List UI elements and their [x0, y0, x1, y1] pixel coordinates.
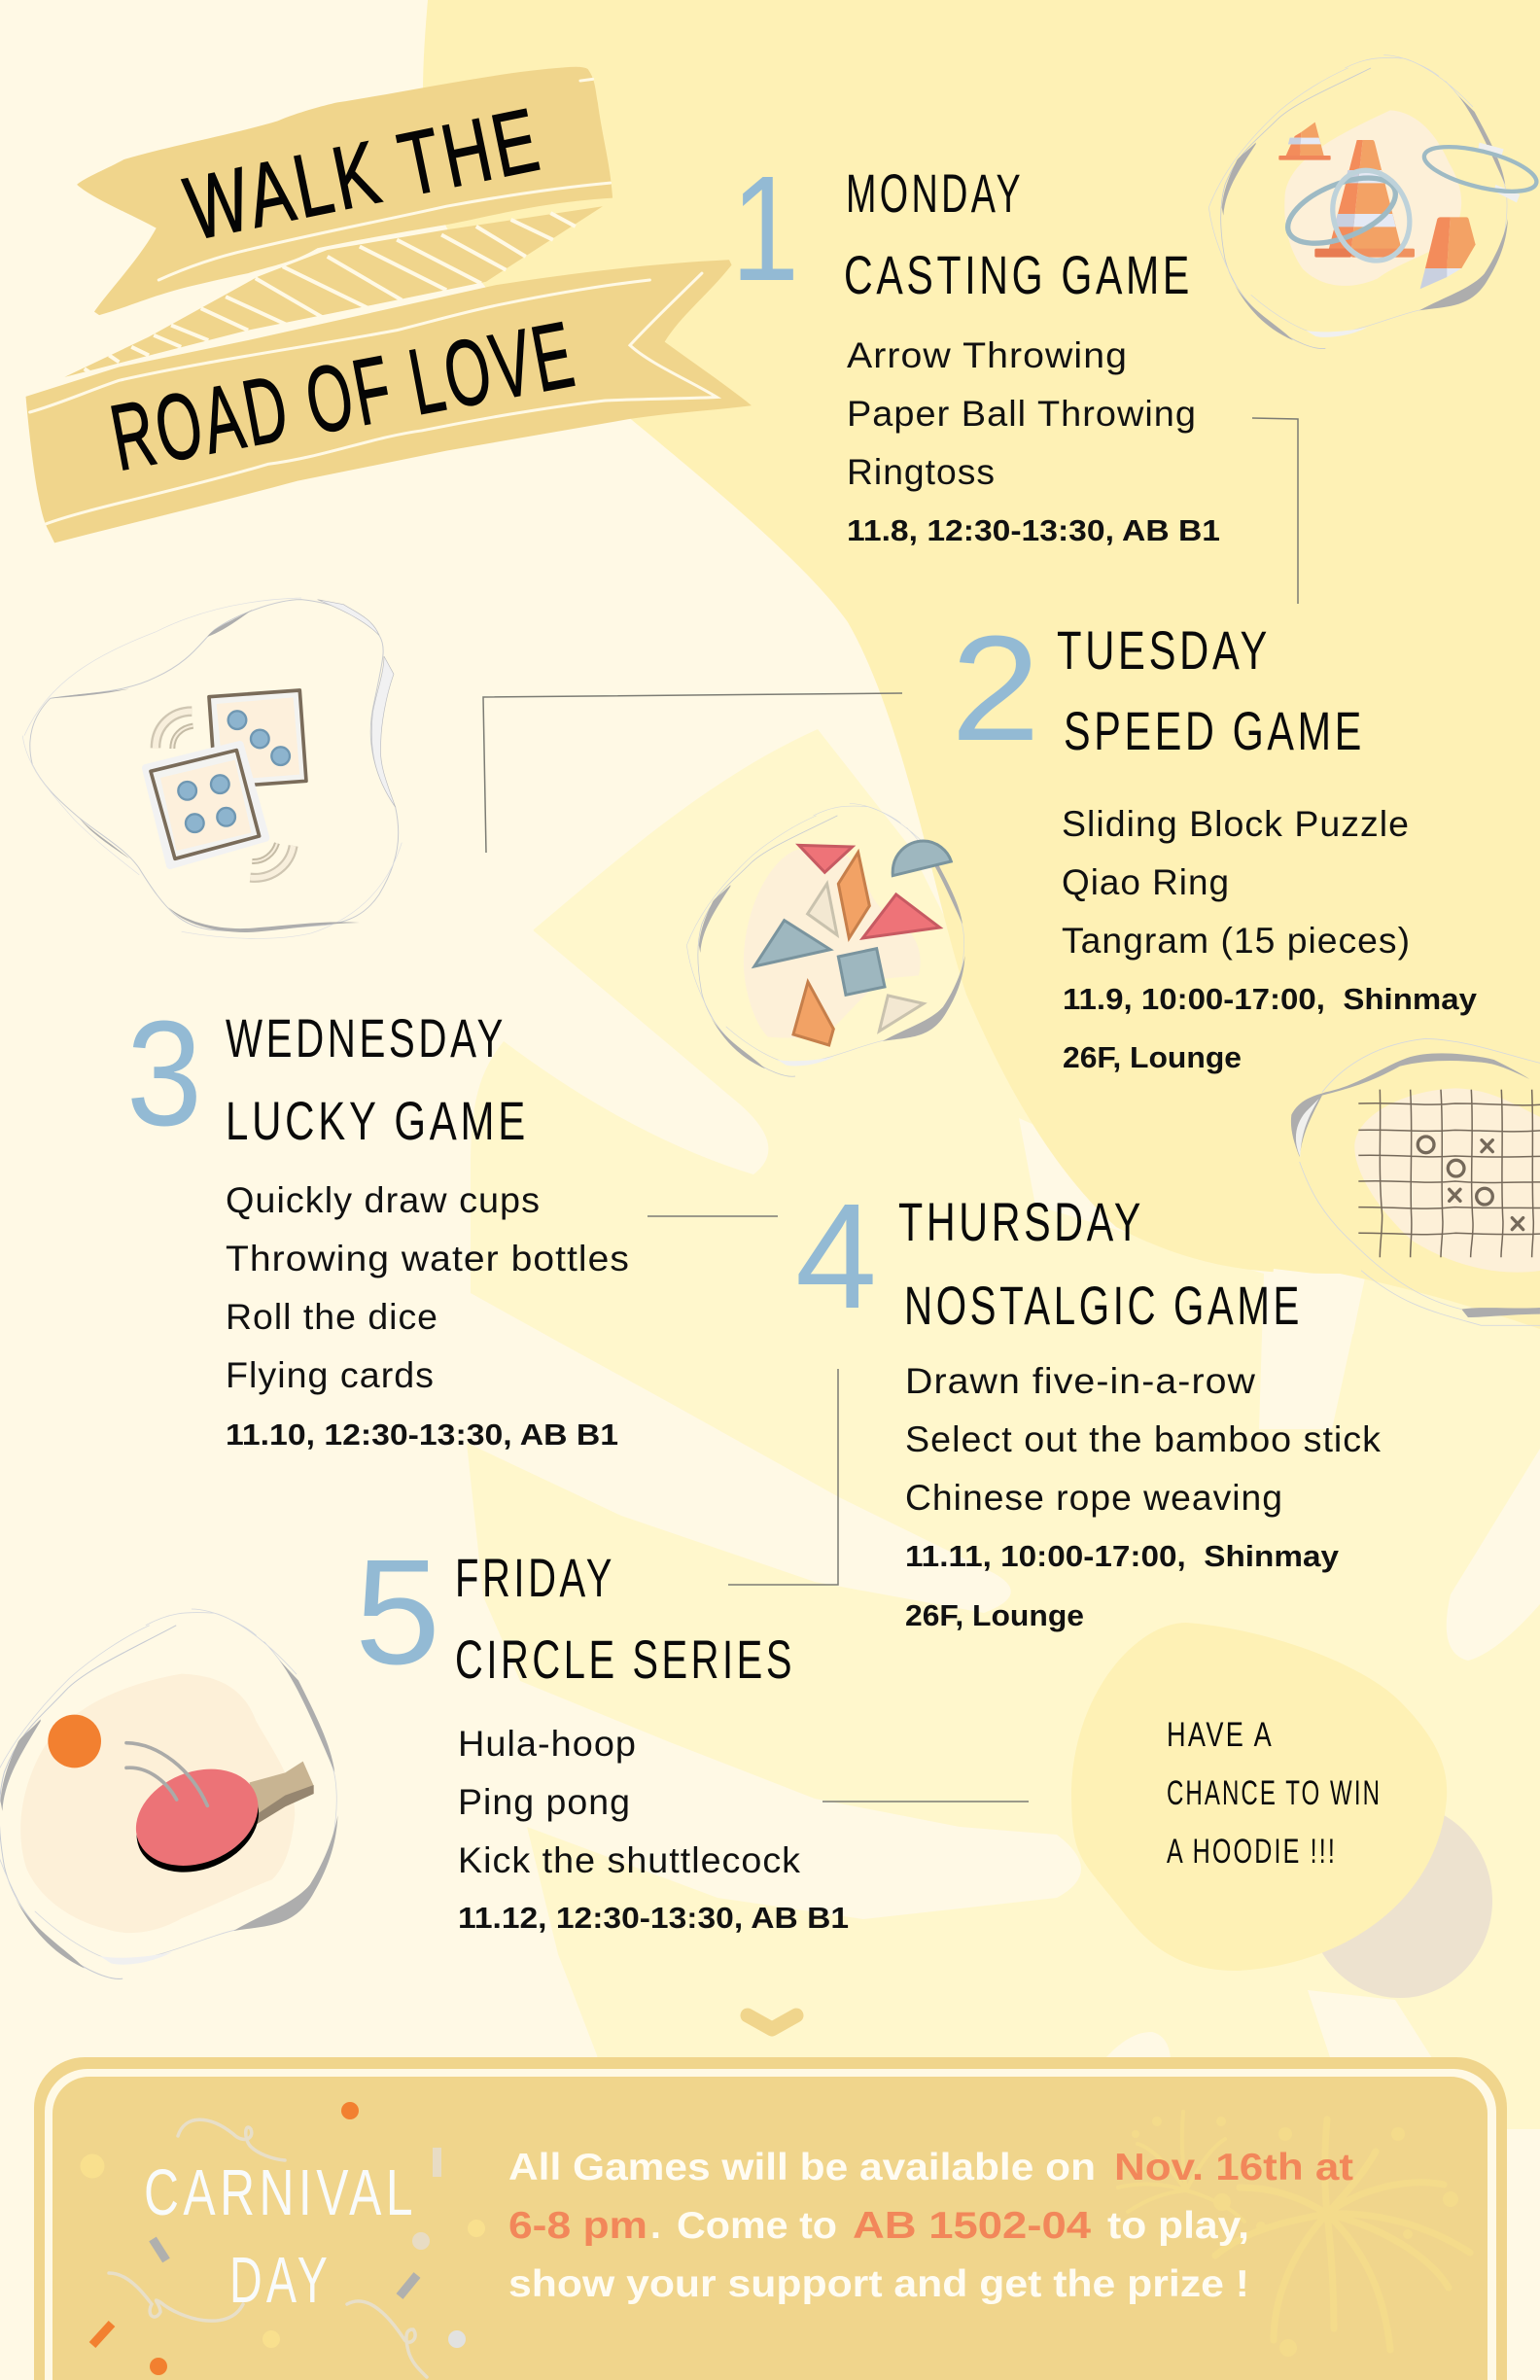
Tuesday games: 26F, Lounge — [1063, 1040, 1242, 1074]
carnival heading: CARNIVAL — [144, 2156, 417, 2229]
Tuesday games: Tangram (15 pieces) — [1062, 921, 1411, 961]
Tuesday heading: SPEED GAME — [1064, 700, 1365, 761]
Friday games: Ping pong — [458, 1782, 631, 1822]
carnival description — [508, 2147, 1353, 2305]
Tuesday games — [1062, 804, 1478, 1074]
panel: Monday — [731, 145, 1220, 547]
title banner — [26, 67, 752, 542]
Wednesday heading — [226, 1007, 529, 1151]
Tuesday heading — [1057, 619, 1365, 761]
Tuesday games: Sliding Block Puzzle — [1062, 804, 1410, 844]
carnival description: . — [650, 2205, 661, 2247]
Thursday games: 11.11, 10:00-17:00, Shinmay — [905, 1539, 1340, 1573]
Thursday games — [905, 1361, 1382, 1632]
Friday games: 11.12, 12:30-13:30, AB B1 — [458, 1901, 849, 1935]
Tuesday games: 11.9, 10:00-17:00, Shinmay — [1063, 982, 1478, 1016]
Thursday games: Select out the bamboo stick — [905, 1419, 1382, 1459]
icon: five-in-a-row grid — [1291, 1038, 1540, 1325]
Friday games: Hula-hoop — [458, 1724, 637, 1764]
carnival heading — [144, 2156, 417, 2317]
panel: Wednesday — [126, 990, 630, 1452]
Friday heading — [455, 1547, 795, 1690]
number 2: 2 — [951, 605, 1040, 772]
Wednesday games: Roll the dice — [226, 1297, 438, 1337]
Friday heading: CIRCLE SERIES — [455, 1628, 795, 1690]
Thursday games: Chinese rope weaving — [905, 1478, 1283, 1518]
carnival description: AB 1502-04 — [853, 2205, 1091, 2247]
Monday games: 11.8, 12:30-13:30, AB B1 — [847, 513, 1220, 547]
number 3: 3 — [126, 990, 202, 1157]
callout: win a hoodie — [1071, 1623, 1492, 1998]
Thursday heading: THURSDAY — [898, 1191, 1144, 1252]
Friday games: Kick the shuttlecock — [458, 1840, 801, 1880]
Wednesday games: Flying cards — [226, 1355, 435, 1395]
icon: traffic cones and rings — [1208, 55, 1540, 349]
Monday games: Ringtoss — [847, 452, 996, 492]
Friday games — [458, 1724, 849, 1935]
icon: tangram pieces — [686, 803, 965, 1076]
ribbon shapes — [26, 67, 752, 542]
panel: Friday — [355, 1528, 849, 1935]
carnival description: 6-8 pm — [508, 2205, 648, 2247]
icon: confetti — [80, 2102, 485, 2377]
carnival description: All Games will be available on — [508, 2147, 1096, 2188]
Wednesday games: 11.10, 12:30-13:30, AB B1 — [226, 1418, 618, 1452]
Wednesday games: Throwing water bottles — [226, 1239, 630, 1278]
Monday games: Paper Ball Throwing — [847, 394, 1197, 434]
title line 2: ROAD OF LOVE — [103, 302, 584, 491]
carnival description: Come to — [677, 2205, 837, 2247]
Monday heading: CASTING GAME — [844, 244, 1193, 305]
callout: win a hoodie: A HOODIE !!! — [1167, 1833, 1337, 1871]
callout: win a hoodie: HAVE A — [1167, 1716, 1274, 1754]
Tuesday heading: TUESDAY — [1057, 619, 1271, 681]
Thursday games: Drawn five-in-a-row — [905, 1361, 1256, 1401]
Monday games — [847, 335, 1220, 547]
Wednesday heading: LUCKY GAME — [226, 1090, 529, 1151]
title line 1: WALK THE — [178, 89, 549, 260]
arrow: chevron down — [748, 2015, 796, 2029]
carnival description: to play, — [1107, 2205, 1249, 2247]
connector lines — [483, 418, 1298, 1802]
Thursday games: 26F, Lounge — [905, 1598, 1084, 1632]
callout: win a hoodie: CHANCE TO WIN — [1167, 1774, 1382, 1812]
Wednesday games: Quickly draw cups — [226, 1180, 541, 1220]
Thursday heading: NOSTALGIC GAME — [904, 1275, 1303, 1336]
panel: Tuesday — [951, 605, 1478, 1074]
Monday heading — [844, 162, 1193, 305]
carnival description: Nov. 16th at — [1114, 2147, 1353, 2188]
Wednesday heading: WEDNESDAY — [226, 1007, 507, 1068]
number 5: 5 — [355, 1528, 440, 1696]
Tuesday games: Qiao Ring — [1062, 862, 1230, 902]
panel: Thursday — [795, 1172, 1382, 1632]
Wednesday games — [226, 1180, 630, 1452]
icon: fireworks — [1118, 2112, 1470, 2357]
carnival description: show your support and get the prize ! — [508, 2263, 1249, 2305]
icon: dice — [22, 598, 402, 938]
icon: ping pong paddle — [0, 1609, 337, 1978]
Monday heading: MONDAY — [846, 162, 1024, 224]
number 4: 4 — [795, 1172, 877, 1340]
number 1: 1 — [731, 145, 799, 312]
carnival heading: DAY — [229, 2244, 332, 2317]
Friday heading: FRIDAY — [455, 1547, 615, 1608]
Thursday heading — [898, 1191, 1303, 1336]
Monday games: Arrow Throwing — [847, 335, 1128, 375]
panel: carnival day — [34, 2057, 1507, 2380]
